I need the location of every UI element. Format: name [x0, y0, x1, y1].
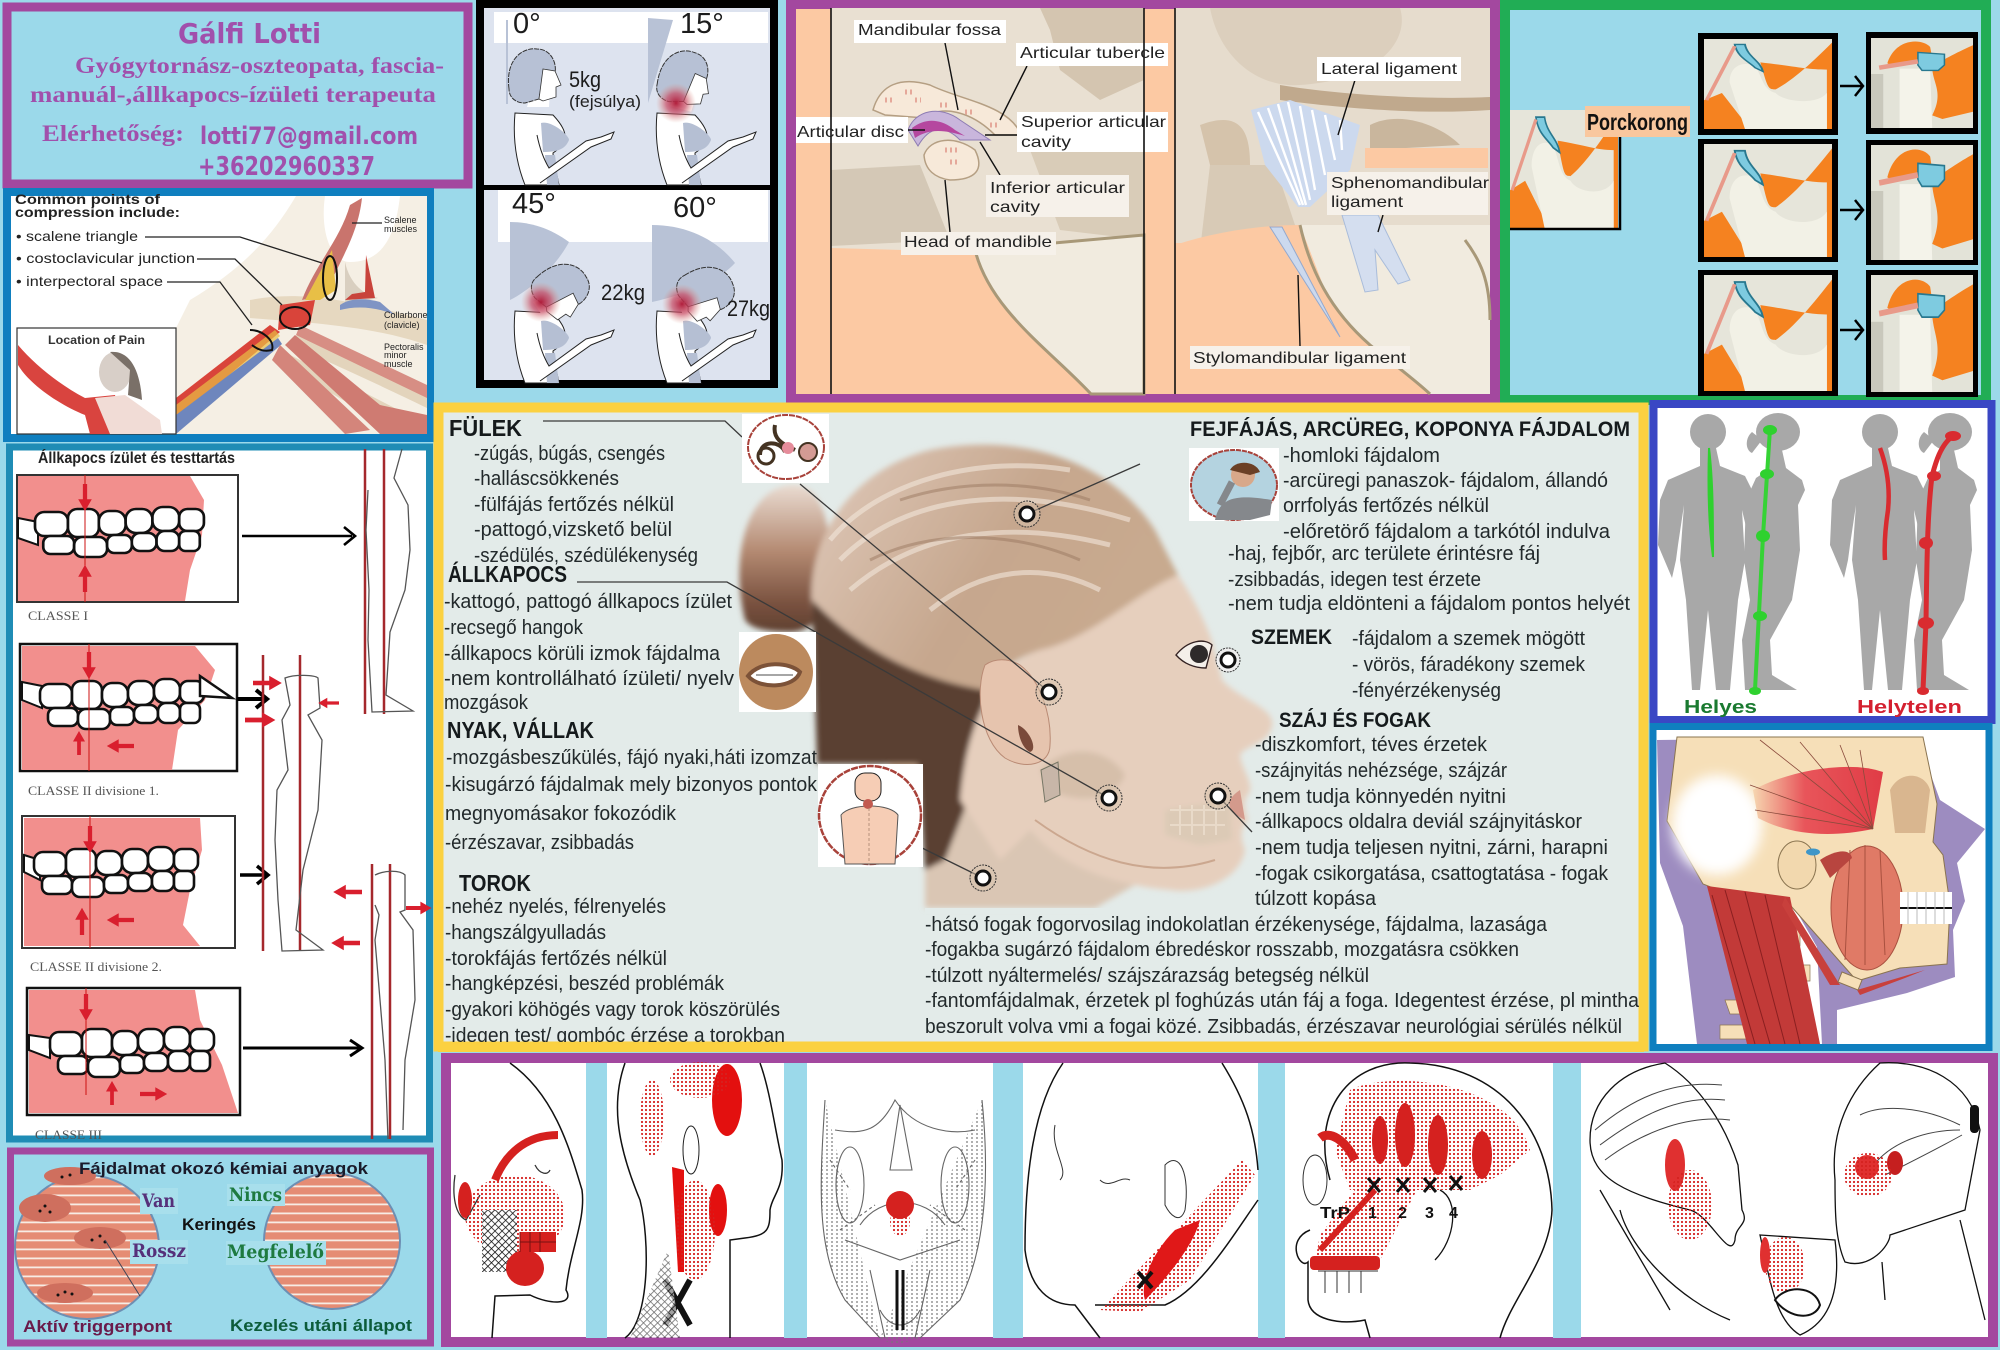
treated muscle circle [264, 1173, 400, 1309]
text: throat: -nehéz nyelés, félrenyelés [445, 896, 666, 918]
bite class I: CLASSE I [28, 608, 88, 623]
trigger point labels [23, 1159, 412, 1336]
degree and weight labels: 27kg [727, 296, 770, 321]
disc image and label: Porckorong [1587, 109, 1688, 135]
text: ears: -szédülés, szédülékenység [474, 545, 698, 567]
pain map 4 [1025, 1063, 1258, 1338]
arrows between tiles [1840, 76, 1863, 340]
figure: 45 degrees [514, 253, 614, 383]
text: eyes: -fényérzékenység [1352, 680, 1501, 702]
panel: joint and ligament anatomy [791, 4, 1495, 399]
compression text: • scalene triangle [16, 228, 138, 244]
posture labels [1684, 697, 1962, 717]
text: ears: -halláscsökkenés [474, 468, 619, 490]
text: headache and sinus: -zsibbadás, idegen test érzete [1228, 569, 1481, 591]
compression text [15, 191, 428, 369]
contact name: Gálfi Lotti [178, 17, 321, 50]
bite class III [27, 988, 240, 1142]
text: jaw: -állkapocs körüli izmok fájdalma [444, 643, 721, 665]
skin silhouette [1657, 737, 1985, 1044]
profession lines [30, 53, 444, 107]
bite class II division 2: CLASSE II divisione 2. [30, 959, 162, 974]
hyoid [1838, 972, 1862, 990]
eye socket [1890, 776, 1930, 833]
posture figure 2 [263, 655, 323, 951]
compression text: muscles [384, 224, 418, 234]
joint cross-section [796, 8, 1168, 394]
separators [586, 1063, 1581, 1338]
icon: back and neck [818, 764, 923, 867]
panel: head and neck muscles [1653, 726, 1989, 1048]
anatomy labels: Articular disc [797, 124, 904, 141]
icon: headache [1189, 448, 1279, 521]
contact details [42, 121, 418, 182]
text: mouth and teeth: túlzott kopása [1255, 888, 1377, 910]
text: mouth and teeth: -fogak csikorgatása, csattogtatása - fogak [1255, 863, 1609, 885]
degree and weight labels: (fejsúlya) [569, 92, 641, 111]
degree and weight labels: 0° [513, 8, 541, 40]
text: mouth and teeth [925, 709, 1640, 1038]
panel: trigger point muscle comparison [10, 1151, 430, 1343]
text: neck and shoulders: -kisugárzó fájdalmak mely bizonyos pontok [445, 774, 818, 796]
compression text: Common points of [15, 191, 160, 207]
text: neck and shoulders: NYAK, VÁLLAK [447, 716, 594, 743]
text: jaw: mozgások [444, 692, 529, 714]
pain map 5: TrP [1320, 1205, 1350, 1222]
text: throat: TOROK [459, 870, 531, 896]
compression text: • interpectoral space [16, 273, 163, 289]
red posture arrows [245, 676, 432, 950]
text: headache and sinus: FEJFÁJÁS, ARCÜREG, KOPONYA FÁJDALOM [1190, 418, 1630, 441]
anatomy labels [797, 22, 1490, 367]
pain map 5: 4 [1449, 1205, 1458, 1222]
panel: disc displacement sequence [1505, 5, 1986, 400]
text: mouth and teeth: -diszkomfort, téves érzetek [1255, 734, 1488, 756]
masseter muscle [1831, 845, 1903, 970]
inset: location of pain [17, 328, 176, 434]
trigger point labels: Van [141, 1190, 175, 1212]
joint tile row 1 [1698, 32, 1978, 135]
incorrect posture figures [1830, 413, 1977, 695]
degree and weight labels: 45° [512, 188, 556, 220]
anatomy labels: Mandibular fossa [858, 22, 1001, 39]
text: mouth and teeth: -szájnyitás nehézsége, szájzár [1255, 760, 1507, 782]
text: ears: -zúgás, búgás, csengés [474, 443, 665, 465]
degree and weight labels [512, 8, 770, 321]
posture labels: Helyes [1684, 697, 1757, 717]
bite class I [17, 475, 238, 623]
text: headache and sinus [1190, 418, 1630, 615]
posture title: Állkapocs ízület és testtartás [38, 448, 235, 467]
active trigger point circle [15, 1167, 159, 1319]
text: throat [445, 870, 785, 1047]
text: jaw: -nem kontrollálható ízületi/ nyelv [444, 668, 734, 690]
bite class II division 1 [20, 644, 237, 798]
text: mouth and teeth: -fantomfájdalmak, érzetek pl foghúzás után fáj a foga. Idegentest érzése, pl mintha [925, 990, 1640, 1012]
text: headache and sinus: -nem tudja eldönteni a fájdalom pontos helyét [1228, 593, 1630, 615]
anatomy labels: Inferior articular [990, 180, 1126, 197]
pain map 5 [1296, 1063, 1552, 1338]
text: mouth and teeth: beszorult volva vmi a fogai közé. Zsibbadás, érzészavar neurológiai sérülés nélkül [925, 1016, 1622, 1038]
text: eyes: - vörös, fáradékony szemek [1352, 654, 1586, 676]
icon: inner ear [742, 414, 829, 483]
arrows to posture figures [237, 527, 362, 1056]
compression text: Scalene [384, 215, 417, 225]
inset: location of pain: Location of Pain [48, 333, 145, 347]
contact details: +36202960337 [198, 152, 375, 182]
text: mouth and teeth: -nem tudja könnyedén nyitni [1255, 786, 1506, 808]
panel: thoracic outlet compression points [7, 191, 430, 438]
text: eyes [1251, 626, 1586, 702]
anatomy labels: Articular tubercle [1020, 45, 1165, 62]
figure: 0 degrees [508, 49, 614, 185]
text: mouth and teeth: -hátsó fogak fogorvosilag indokolatlan érzékenysége, fájdalma, lazasága [925, 914, 1548, 936]
bite class II division 1: CLASSE II divisione 1. [28, 783, 159, 798]
digastric muscle [1782, 897, 1925, 995]
icon: mouth [739, 632, 816, 712]
anatomy labels: Lateral ligament [1321, 61, 1458, 78]
teeth [1900, 892, 1952, 924]
text: headache and sinus: -előretörő fájdalom a tarkótól indulva [1283, 521, 1611, 543]
joint tile row 3 [1698, 270, 1978, 397]
pain map 5: 2 [1398, 1205, 1407, 1222]
disc image and label [1510, 106, 1690, 229]
posture labels: Helytelen [1857, 697, 1962, 717]
text: headache and sinus: -homloki fájdalom [1283, 445, 1440, 467]
text: throat: -hangszálgyulladás [445, 922, 606, 944]
panel: symptoms map [438, 408, 1644, 1052]
text: throat: -torokfájás fertőzés nélkül [445, 948, 667, 970]
ligaments view [1175, 8, 1490, 394]
anatomy labels: cavity [990, 199, 1040, 216]
degree and weight labels: 15° [680, 8, 724, 40]
head photo [739, 445, 1272, 914]
ear and disc [1778, 841, 1852, 889]
text: mouth and teeth: SZÁJ ÉS FOGAK [1279, 709, 1431, 732]
text: mouth and teeth: -fogakba sugárzó fájdalom ébredéskor rosszabb, mozgatásra csökken [925, 939, 1519, 961]
posture figure 3 [372, 864, 415, 1139]
contact details: lotti77@gmail.com [200, 122, 418, 150]
trigger point labels: Rossz [132, 1240, 186, 1262]
compression text: Collarbone [384, 310, 428, 320]
degree and weight labels: 5kg [569, 67, 601, 92]
pain map 6 [1590, 1063, 1985, 1335]
text: mouth and teeth: -túlzott nyáltermelés/ szájszárazság betegség nélkül [925, 965, 1369, 987]
pain map 3 [821, 1100, 986, 1343]
text: neck and shoulders: megnyomásakor fokozódik [445, 803, 677, 825]
text: ears [449, 415, 698, 567]
text: eyes: -fájdalom a szemek mögött [1352, 628, 1585, 650]
text: headache and sinus: -haj, fejbőr, arc területe érintésre fáj [1228, 543, 1540, 565]
anatomy labels: Superior articular [1021, 114, 1167, 131]
text: neck and shoulders: -érzészavar, zsibbadás [445, 832, 634, 854]
skull [1667, 737, 1950, 981]
callout lines [543, 421, 1252, 878]
compression text: (clavicle) [384, 320, 420, 330]
text: ears: FÜLEK [449, 415, 522, 441]
joint tile row 2 [1698, 139, 1978, 265]
panel: neck tilt weights [476, 4, 778, 384]
compression text: minor [384, 350, 407, 360]
anatomy labels: Sphenomandibular [1331, 175, 1490, 192]
anatomy labels: Stylomandibular ligament [1193, 350, 1407, 367]
temporalis muscle [1750, 740, 1883, 834]
panel: referred pain maps [446, 1058, 1993, 1343]
anatomy labels: ligament [1331, 194, 1404, 211]
text: ears: -pattogó,vizskető belül [474, 519, 672, 541]
bite class II division 2 [22, 816, 235, 974]
compression text: Pectoralis [384, 342, 424, 352]
panel: bite classes and posture [10, 447, 432, 1142]
text: throat: -hangképzési, beszéd problémák [445, 973, 725, 995]
text: ears: -fülfájás fertőzés nélkül [474, 494, 674, 516]
pain map 1 [454, 1063, 583, 1338]
pain point markers [970, 501, 1240, 891]
trigger point labels: Nincs [229, 1184, 282, 1206]
text: mouth and teeth: -nem tudja teljesen nyitni, zárni, harapni [1255, 837, 1608, 859]
vertebrae [1720, 930, 1810, 1039]
text: jaw [444, 560, 734, 714]
text: jaw: -recsegő hangok [444, 617, 584, 639]
sternocleidomastoid [1707, 886, 1820, 1044]
degree and weight labels: 60° [673, 192, 717, 224]
panel: contact card [7, 7, 468, 184]
pain map 5: 3 [1425, 1205, 1434, 1222]
degree and weight labels: 22kg [601, 280, 645, 305]
text: headache and sinus: -arcüregi panaszok- fájdalom, állandó [1283, 470, 1608, 492]
contact details: Elérhetőség: [42, 121, 184, 146]
correct posture figures [1658, 413, 1805, 695]
text: jaw: ÁLLKAPOCS [448, 560, 567, 587]
panel: correct vs incorrect posture [1654, 404, 1992, 720]
anatomy labels: cavity [1021, 134, 1071, 151]
text: throat: -gyakori köhögés vagy torok köszörülés [445, 999, 780, 1021]
figure: 15 degrees [652, 45, 756, 185]
trigger point labels: Keringés [182, 1215, 256, 1234]
text: mouth and teeth: -állkapocs oldalra deviál szájnyitáskor [1255, 811, 1582, 833]
compression text: compression include: [15, 204, 180, 220]
pain map 2 [617, 1062, 782, 1338]
figure: 60 degrees [656, 258, 756, 383]
compression text: muscle [384, 359, 413, 369]
profession lines: manuál-,állkapocs-ízületi terapeuta [30, 82, 437, 107]
text: eyes: SZEMEK [1251, 626, 1332, 649]
posture figure 1 [365, 449, 413, 714]
highlight [1672, 775, 1762, 875]
text: headache and sinus: orrfolyás fertőzés nélkül [1283, 495, 1489, 517]
pain map 5: 1 [1368, 1205, 1377, 1222]
text: neck and shoulders [445, 716, 818, 854]
profession lines: Gyógytornász-oszteopata, fascia- [75, 53, 444, 78]
trigger point labels: Fájdalmat okozó kémiai anyagok [79, 1159, 369, 1178]
text: jaw: -kattogó, pattogó állkapocs ízület [444, 591, 732, 613]
angle wedges [506, 18, 735, 302]
compression text: • costoclavicular junction [16, 250, 195, 266]
trigger point labels: Megfelelő [227, 1241, 324, 1263]
anatomy labels: Head of mandible [904, 234, 1052, 251]
text: throat: -idegen test/ gombóc érzése a torokban [445, 1025, 785, 1047]
text: neck and shoulders: -mozgásbeszűkülés, fájó nyaki,háti izomzat [446, 747, 817, 769]
trigger point labels: Aktív triggerpont [23, 1317, 172, 1336]
trigger point labels: Kezelés utáni állapot [230, 1316, 412, 1335]
bite class III: CLASSE III [35, 1127, 102, 1142]
